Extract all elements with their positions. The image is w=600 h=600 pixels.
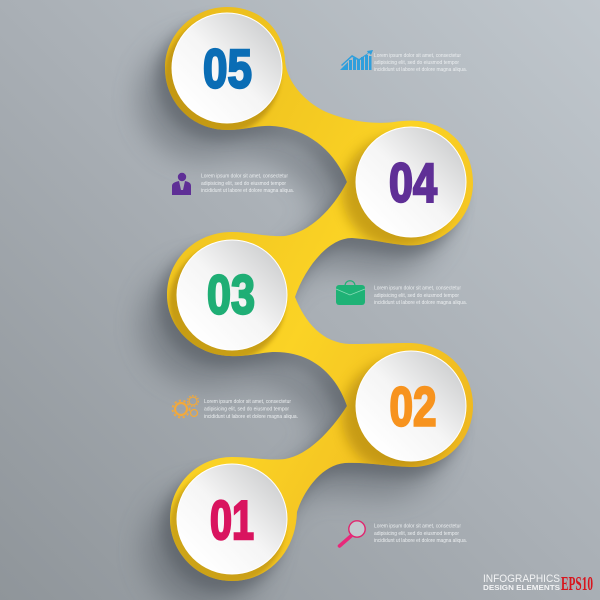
circle 02 — [356, 351, 466, 461]
panel: yellow connected ribbon — [164, 7, 473, 585]
brand label: INFOGRAPHICS — [483, 573, 560, 585]
ribbon shading from circles — [164, 18, 454, 585]
brand label — [483, 573, 593, 595]
text block: 05 — [374, 53, 467, 73]
text block: 02: incididunt ut labore et dolore magna aliqua. — [204, 414, 298, 420]
icon: magnifier — [340, 521, 365, 546]
number 02: 02 — [390, 376, 436, 438]
number 04: 04 — [389, 152, 437, 214]
brand label: DESIGN ELEMENTS — [483, 583, 560, 592]
text block: 04: incididunt ut labore et dolore magna aliqua. — [201, 188, 294, 194]
long cast shadows — [139, 17, 465, 600]
text block: 05: adipisicing elit, sed do eiusmod tempor — [374, 60, 459, 66]
text block: 04 — [201, 174, 294, 194]
icon: briefcase — [336, 281, 365, 305]
number 05: 05 — [203, 38, 252, 100]
text block: 02: adipisicing elit, sed do eiusmod tempor — [204, 406, 289, 412]
text block: 01: adipisicing elit, sed do eiusmod tempor — [374, 531, 459, 537]
circle 03 — [177, 240, 287, 350]
text block: 04: Lorem ipsum dolor sit amet, consectetur — [201, 174, 288, 180]
circle 04 — [356, 127, 466, 237]
text block: 04: adipisicing elit, sed do eiusmod tempor — [201, 181, 286, 187]
text block: 01: Lorem ipsum dolor sit amet, consectetur — [374, 524, 461, 530]
text block: 05: Lorem ipsum dolor sit amet, consectetur — [374, 53, 461, 59]
number 03: 03 — [207, 264, 255, 326]
text block: 05: incididunt ut labore et dolore magna aliqua. — [374, 67, 467, 73]
circle 01 — [177, 464, 287, 574]
icon: rising bar chart — [340, 50, 373, 70]
text block: 03: incididunt ut labore et dolore magna aliqua. — [374, 300, 467, 306]
circle 05 — [172, 13, 282, 123]
text block: 01: incididunt ut labore et dolore magna aliqua. — [374, 538, 467, 544]
number 01: 01 — [210, 489, 254, 551]
text block: 03 — [374, 286, 467, 306]
text block: 03: adipisicing elit, sed do eiusmod tempor — [374, 293, 459, 299]
icon: gears — [172, 396, 198, 418]
text block: 02 — [204, 399, 298, 420]
text block: 02: Lorem ipsum dolor sit amet, consectetur — [204, 399, 291, 405]
icon: businessman — [172, 173, 191, 195]
text block: 03: Lorem ipsum dolor sit amet, consectetur — [374, 286, 461, 292]
text block: 01 — [374, 524, 467, 544]
